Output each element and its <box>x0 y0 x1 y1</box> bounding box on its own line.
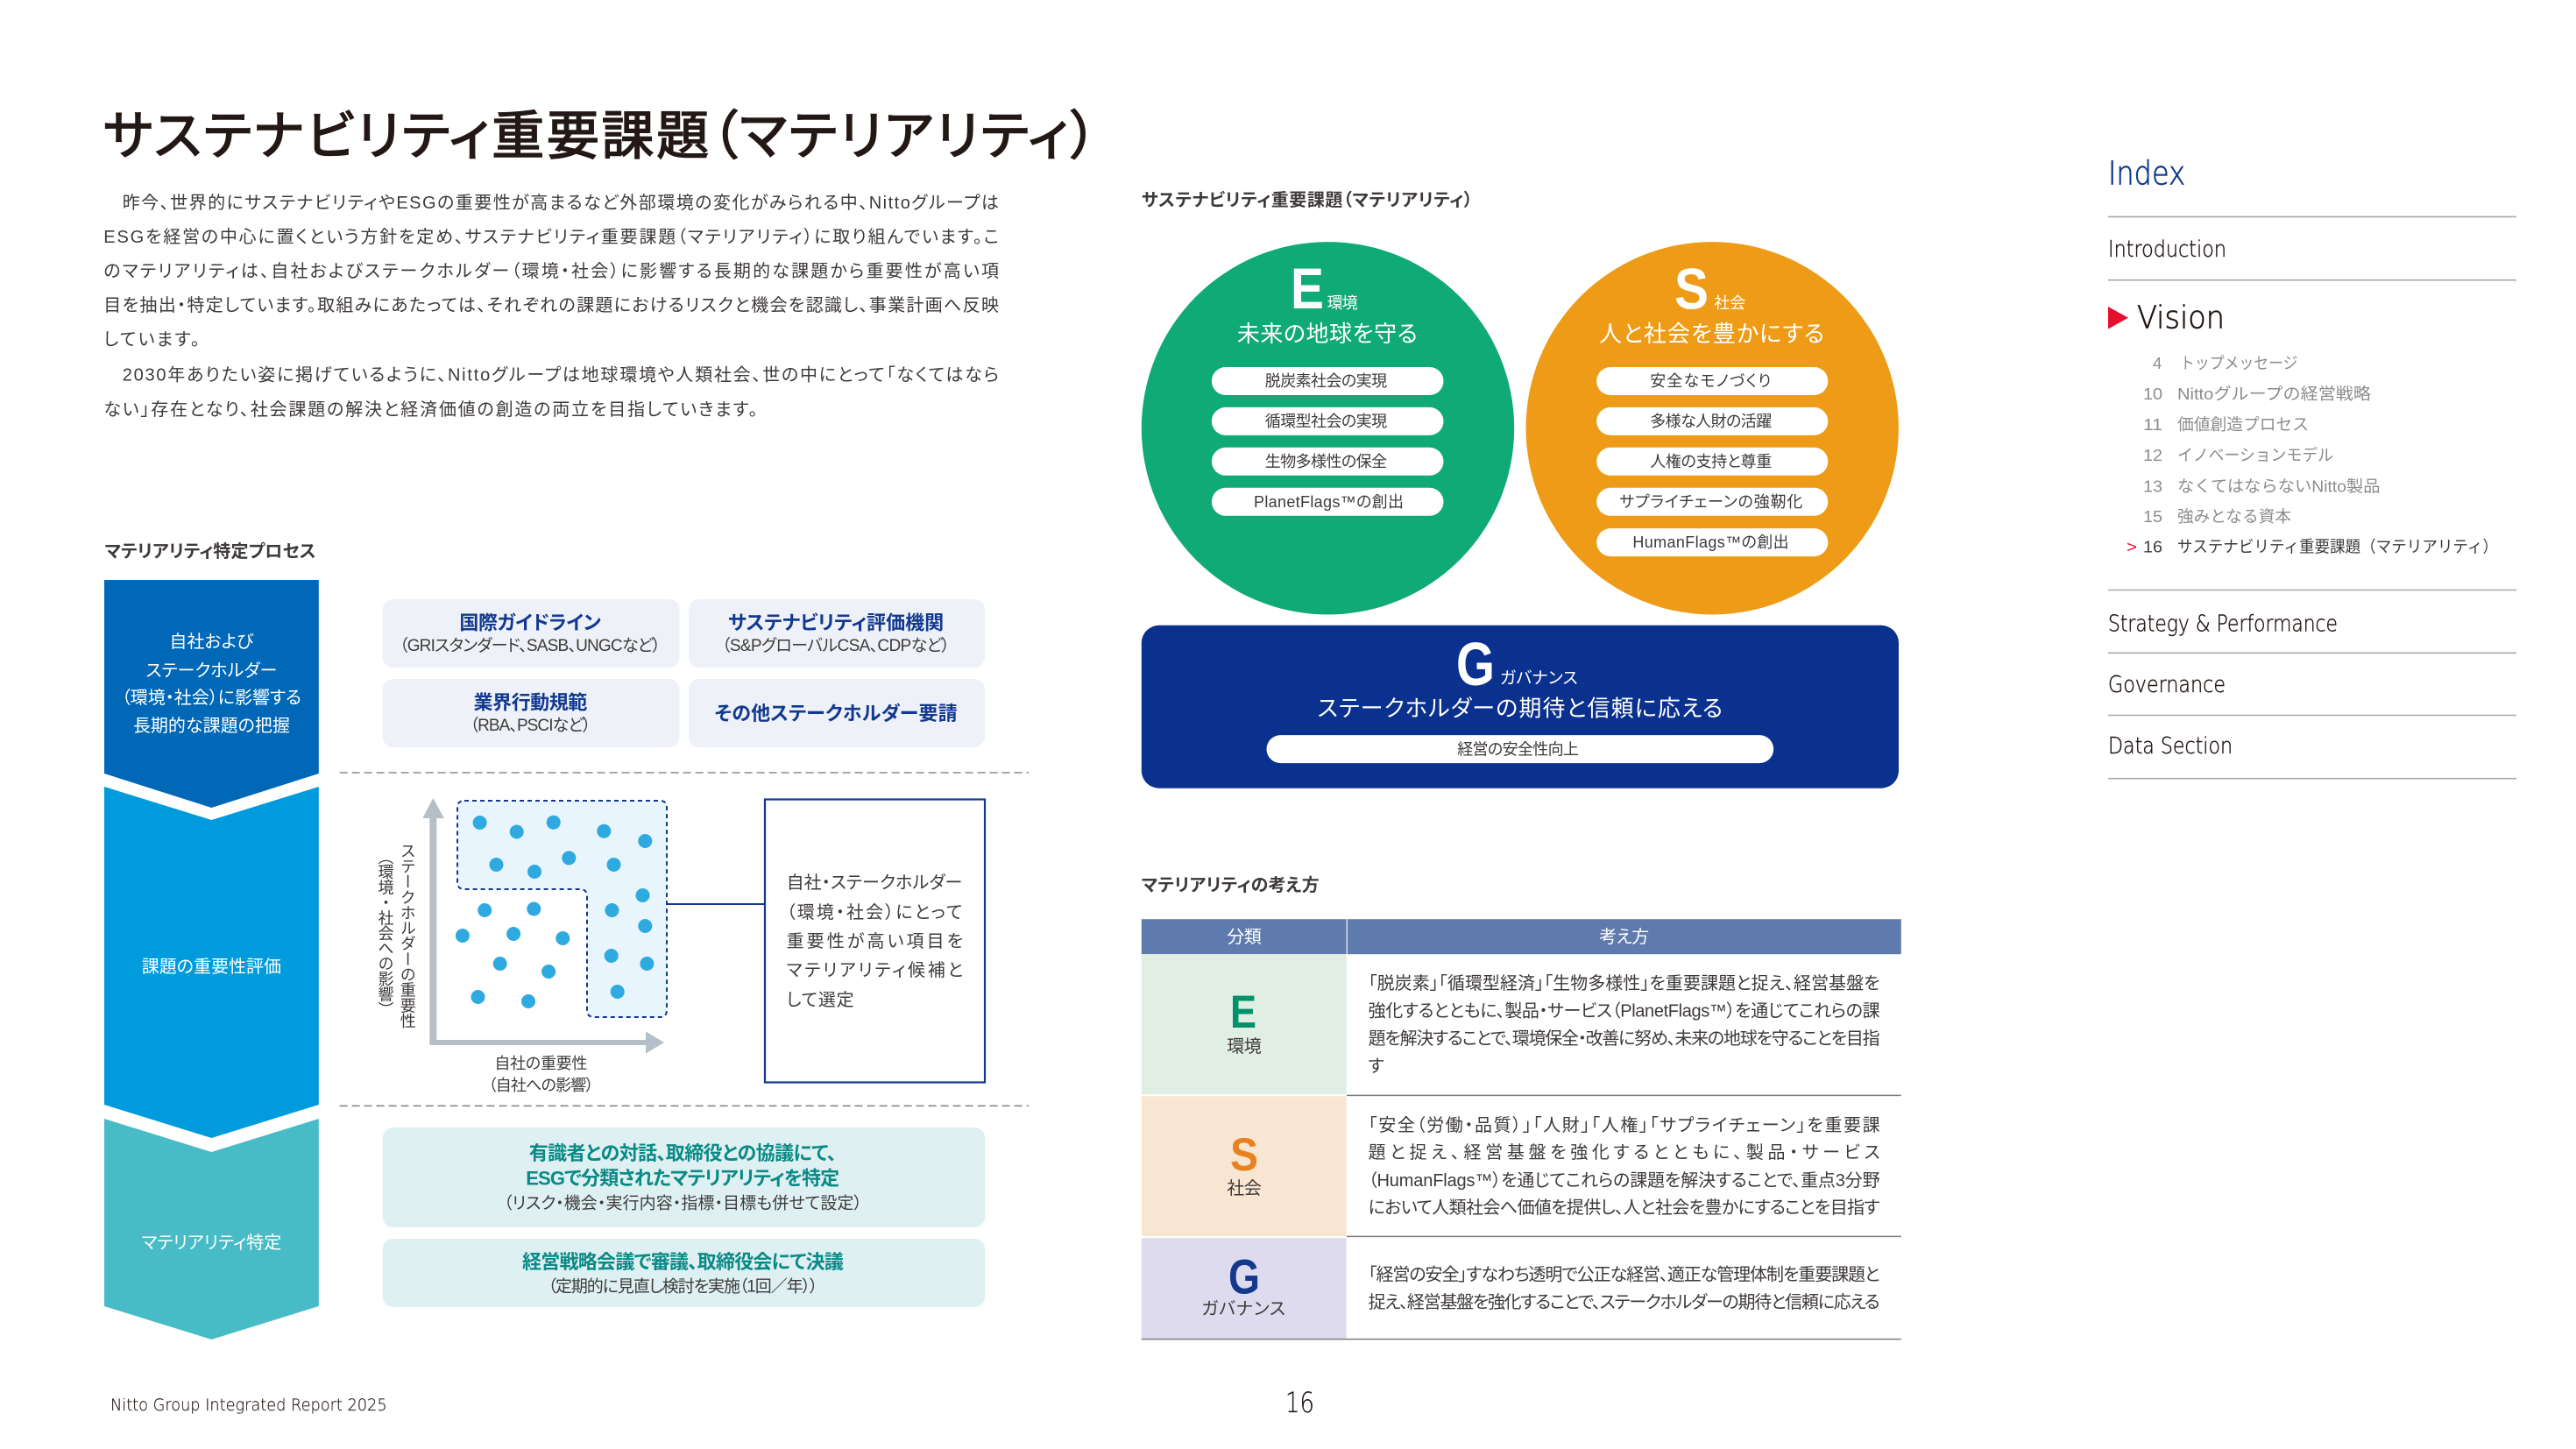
pills: S topics: 安全なモノづくり <box>1650 372 1771 390</box>
nav: Data Section: Data Section <box>2108 733 2233 760</box>
box: dialogue with experts: ESGで分類されたマテリアリティを特定 <box>526 1167 839 1190</box>
pills: S topics: 人権の支持と尊重 <box>1650 453 1772 470</box>
row: G <box>1142 1238 1880 1339</box>
heading: materiality identification process: マテリアリティ特定プロセス <box>105 541 316 562</box>
chevron: step 1 <box>104 580 319 808</box>
nav: Vision page list: イノベーションモデル <box>2177 446 2333 464</box>
nav: Vision page list: トップメッセージ <box>2180 354 2297 372</box>
panel: S circle <box>1526 242 1899 615</box>
row: S: （HumanFlags™）を通じてこれらの課題を解決することで、重点3分野 <box>1369 1170 1880 1191</box>
footer: report name: Nitto Group Integrated Report 2025 <box>110 1396 387 1415</box>
box: dialogue with experts: 有識者との対話、取締役との協議にて、 <box>529 1142 837 1164</box>
pills: S topics: HumanFlags™の創出 <box>1632 534 1789 551</box>
nav: Vision page list: 10 <box>2143 385 2162 403</box>
callout: selection result: して選定 <box>787 990 854 1010</box>
icon: red current-section triangle <box>2108 307 2128 329</box>
intro text block: 昨今、世界的にサステナビリティやESGの重要性が高まるなど外部環境の変化がみられる中、Nittoグループは <box>123 193 999 213</box>
nav: Vision page list: 16 <box>2143 538 2162 555</box>
row: E <box>1142 954 1880 1094</box>
chevron: step 1: （環境・社会）に影響する <box>122 688 301 708</box>
panel: G governance <box>1142 626 1899 788</box>
panel: S circle: 人と社会を豊かにする <box>1599 321 1824 347</box>
pill: G topic: 経営の安全性向上 <box>1457 741 1579 759</box>
y axis label: ステークホルダーの重要性 <box>399 843 416 1028</box>
intro text block <box>103 193 999 420</box>
chevron: step 1: 自社および <box>169 632 254 652</box>
nav: Vision page list: 12 <box>2143 446 2162 464</box>
box: industry codes: （RBA、PSCIなど） <box>470 716 591 735</box>
nav: Vision page list: 価値創造プロセス <box>2177 415 2309 434</box>
heading: materiality approach: マテリアリティの考え方 <box>1142 875 1320 895</box>
row: S: 題と捉え、経営基盤を強化するとともに、製品・サービス <box>1369 1142 1880 1163</box>
intro text block: ESGを経営の中心に置くという方針を定め、サステナビリティ重要課題（マテリアリティ）に取り組んでいます。こ <box>103 227 999 247</box>
box: industry codes <box>383 679 680 747</box>
intro text block: ない」存在となり、社会課題の解決と経済価値の創造の両立を目指していきます。 <box>103 399 758 420</box>
highlighted region <box>457 801 667 1017</box>
row: E: E <box>1230 986 1256 1038</box>
panel: G governance: ガバナンス <box>1500 668 1578 688</box>
callout: selection result: マテリアリティ候補と <box>787 960 963 980</box>
callout: selection result <box>765 799 985 1083</box>
callout: selection result: 自社・ステークホルダー <box>787 873 962 893</box>
pills: S topics <box>1596 367 1828 556</box>
table: approach by category <box>1142 919 1901 1339</box>
box: other stakeholders <box>689 679 985 747</box>
intro text block: 2030年ありたい姿に掲げているように、Nittoグループは地球環境や人類社会、世の中にとって「なくてはなら <box>123 364 999 385</box>
row: G: 「経営の安全」すなわち透明で公正な経営、適正な管理体制を重要課題と <box>1369 1265 1880 1284</box>
box: dialogue with experts: （リスク・機会・実行内容・指標・目標も併せて設定） <box>504 1193 862 1212</box>
table header <box>1142 919 1901 954</box>
box: international guidelines: 国際ガイドライン <box>459 611 601 634</box>
connector line <box>667 903 764 905</box>
box: industry codes: 業界行動規範 <box>473 692 587 713</box>
row: E: 「脱炭素」「循環型経済」「生物多様性」を重要課題と捉え、経営基盤を <box>1369 973 1880 993</box>
heading: materiality: サステナビリティ重要課題（マテリアリティ） <box>1142 190 1473 210</box>
box: evaluation agencies <box>689 599 985 668</box>
axes <box>422 798 664 1053</box>
panel: E circle <box>1142 242 1514 615</box>
box: international guidelines: （GRIスタンダード、SASB、UNGCなど） <box>400 636 661 655</box>
row: E: 強化するとともに、製品・サービス（PlanetFlags™）を通じてこれらの課 <box>1369 1000 1880 1021</box>
nav: Vision page list: 15 <box>2143 507 2162 526</box>
nav: Vision page list: 強みとなる資本 <box>2177 507 2291 526</box>
nav: Vision page list: Nittoグループの経営戦略 <box>2177 385 2371 403</box>
box: evaluation agencies: （S&PグローバルCSA、CDPなど） <box>722 636 950 655</box>
index heading: Index <box>2108 155 2185 193</box>
nav: Governance: Governance <box>2108 672 2226 698</box>
pill: G topic <box>1267 735 1773 763</box>
x axis label: 自社の重要性 <box>494 1055 587 1072</box>
row: G: G <box>1228 1249 1260 1304</box>
intro text block: しています。 <box>103 330 200 350</box>
row: S: 社会 <box>1227 1178 1262 1198</box>
box: strategy meeting <box>383 1239 985 1307</box>
table header: 考え方 <box>1599 927 1649 947</box>
chevron: step 1: ステークホルダー <box>145 661 277 681</box>
pills: E topics: 脱炭素社会の実現 <box>1265 372 1387 390</box>
data points <box>456 816 654 1008</box>
row: S <box>1142 1096 1880 1236</box>
nav: Vision page list: なくてはならないNitto製品 <box>2177 477 2380 495</box>
row: S: 「安全（労働・品質）」「人財」「人権」「サプライチェーン」を重要課 <box>1369 1115 1880 1135</box>
panel: E circle: 未来の地球を守る <box>1237 321 1418 347</box>
box: international guidelines <box>383 599 680 668</box>
pills: E topics <box>1212 367 1444 516</box>
nav: Introduction: Introduction <box>2108 237 2226 263</box>
box: evaluation agencies: サステナビリティ評価機関 <box>728 611 944 634</box>
row: S: S <box>1230 1129 1258 1181</box>
chart: materiality matrix <box>377 798 667 1094</box>
y axis label: （環境・社会への影響） <box>377 849 394 1016</box>
nav: Vision page list <box>2127 354 2498 555</box>
nav: Vision: Vision <box>2137 300 2225 336</box>
chevron: step 2: 課題の重要性評価 <box>142 957 281 977</box>
row: E: 題を解決することで、環境保全・改善に努め、未来の地球を守ることを目指 <box>1369 1028 1880 1049</box>
pills: E topics: 循環型社会の実現 <box>1265 413 1387 430</box>
panel: E circle: E <box>1291 256 1324 321</box>
row: E: す <box>1369 1057 1384 1076</box>
pills: E topics: PlanetFlags™の創出 <box>1254 493 1404 511</box>
panel: process chevrons <box>104 580 319 1339</box>
nav: Strategy & Performance: Strategy & Performance <box>2108 611 2338 638</box>
intro text block: 目を抽出・特定しています。取組みにあたっては、それぞれの課題におけるリスクと機会を認識し、事業計画へ反映 <box>103 295 999 315</box>
pills: S topics: 多様な人財の活躍 <box>1650 413 1772 430</box>
y axis label <box>377 843 416 1028</box>
nav: Vision page list: 11 <box>2143 415 2162 434</box>
pills: E topics: 生物多様性の保全 <box>1265 453 1387 470</box>
title: サステナビリティ重要課題（マテリアリティ） <box>103 107 1097 166</box>
callout: selection result: （環境・社会）にとって <box>787 902 962 922</box>
box: dialogue with experts <box>383 1127 985 1227</box>
chevron: step 3 <box>104 1119 319 1339</box>
x axis label: （自社への影響） <box>489 1077 594 1094</box>
chevron: step 3: マテリアリティ特定 <box>141 1233 281 1253</box>
nav: Vision page list: 4 <box>2153 354 2162 372</box>
box: strategy meeting: （定期的に見直し検討を実施（1回／年）） <box>548 1277 818 1297</box>
chevron: step 2 <box>104 787 319 1138</box>
box: other stakeholders: その他ステークホルダー要請 <box>715 703 958 724</box>
intro text block: のマテリアリティは、自社およびステークホルダー（環境・社会）に影響する長期的な課題から重要性が高い項 <box>103 261 999 281</box>
nav: Vision page list: > <box>2127 538 2137 555</box>
panel: S circle: 社会 <box>1714 294 1745 312</box>
chevron: step 1: 長期的な課題の把握 <box>133 716 290 736</box>
row: G: ガバナンス <box>1201 1298 1285 1319</box>
pills: S topics: サプライチェーンの強靭化 <box>1619 493 1802 511</box>
row: E: 環境 <box>1227 1036 1262 1057</box>
box: strategy meeting: 経営戦略会議で審議、取締役会にて決議 <box>522 1251 844 1273</box>
page number: 16 <box>1285 1386 1314 1419</box>
row: G: 捉え、経営基盤を強化することで、ステークホルダーの期待と信頼に応える <box>1369 1292 1880 1312</box>
nav: Vision page list: サステナビリティ重要課題（マテリアリティ） <box>2177 538 2498 555</box>
panel: index navigation <box>2108 155 2516 779</box>
callout: selection result: 重要性が高い項目を <box>787 931 963 951</box>
x axis label <box>489 1055 594 1094</box>
panel: S circle: S <box>1674 256 1709 321</box>
panel: G governance: ステークホルダーの期待と信頼に応える <box>1318 696 1723 722</box>
nav: Vision page list: 13 <box>2143 477 2162 495</box>
panel: identification steps <box>383 1127 985 1307</box>
panel: E circle: 環境 <box>1327 294 1358 312</box>
table header: 分類 <box>1227 927 1262 947</box>
row: S: において人類社会へ価値を提供し、人と社会を豊かにすることを目指す <box>1369 1198 1880 1218</box>
panel: input sources <box>383 599 985 747</box>
panel: G governance: G <box>1456 630 1495 698</box>
